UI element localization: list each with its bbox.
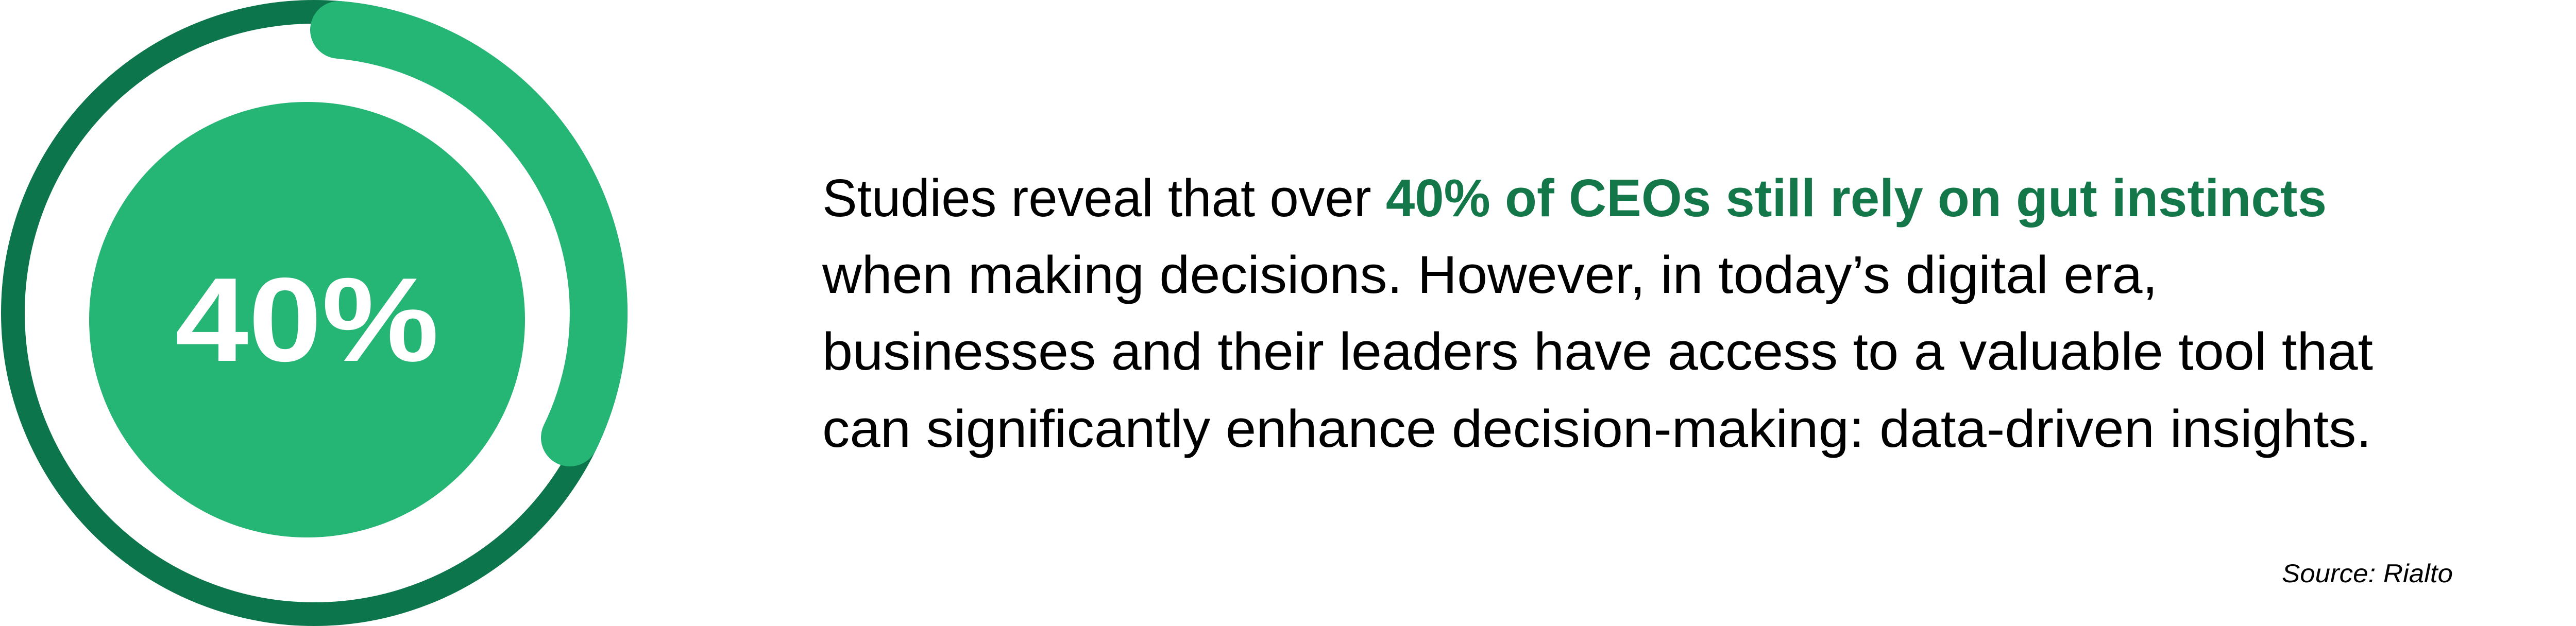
text block: main statement: [822, 168, 2373, 458]
ring: light green progress arc: [339, 30, 599, 438]
chart: progress ring 40%: [13, 12, 616, 614]
text block: main statement: when making decisions. However, in today’s digital era,: [822, 245, 2158, 304]
stat value 40%: 40%: [175, 253, 439, 387]
inner filled circle: [89, 102, 525, 537]
text block: main statement: can significantly enhance decision-making: data-driven insights.: [822, 399, 2371, 458]
ring: dark background track: [13, 12, 616, 614]
text block: main statement: businesses and their leaders have access to a valuable tool that: [822, 322, 2373, 381]
source note: Source: Rialto: [2282, 559, 2453, 588]
text block: main statement: Studies reveal that over 40% of CEOs still rely on gut instincts: [822, 168, 2327, 228]
